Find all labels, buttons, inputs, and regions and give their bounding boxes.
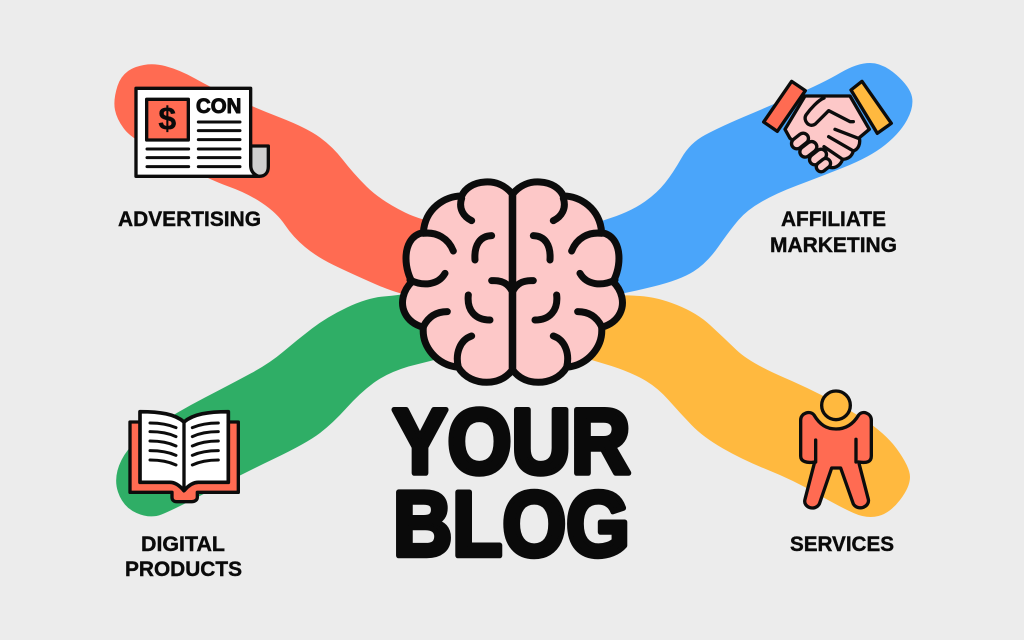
finger 4 bbox=[814, 157, 832, 174]
label: digital products: PRODUCTS bbox=[125, 558, 242, 581]
label: services: SERVICES bbox=[790, 533, 894, 556]
left hemisphere outline bbox=[403, 182, 512, 382]
fingers lower left bbox=[789, 131, 832, 174]
right hemisphere outline bbox=[513, 182, 622, 382]
book pages bbox=[140, 412, 228, 491]
ribbon: digital products (green) bbox=[116, 291, 450, 516]
icon: newspaper bbox=[136, 88, 268, 176]
icon: brain bbox=[403, 182, 622, 382]
body bbox=[801, 413, 871, 508]
ad box bbox=[147, 99, 188, 140]
label: digital products: DIGITAL bbox=[141, 533, 225, 556]
left folds bbox=[410, 194, 512, 370]
label: affiliate marketing: AFFILIATE bbox=[781, 208, 886, 231]
finger 1 bbox=[789, 131, 811, 151]
book cover bbox=[130, 422, 238, 502]
label: digital products bbox=[125, 533, 242, 581]
ribbon: advertising (red) bbox=[114, 64, 450, 296]
head bbox=[822, 391, 850, 420]
label: affiliate marketing: MARKETING bbox=[770, 234, 897, 257]
hands bbox=[785, 96, 869, 168]
spine bbox=[179, 422, 189, 491]
finger 3 bbox=[807, 147, 829, 167]
title: BLOG bbox=[393, 474, 630, 576]
page curl bbox=[251, 146, 268, 176]
left cuff bbox=[764, 81, 805, 131]
ribbon: services (yellow) bbox=[575, 295, 910, 517]
left hemisphere bbox=[403, 182, 512, 382]
right hemisphere bbox=[513, 182, 622, 382]
icon: handshake bbox=[764, 81, 891, 174]
icon: person bbox=[801, 391, 871, 508]
label: advertising: ADVERTISING bbox=[118, 208, 261, 231]
title: YOUR bbox=[392, 391, 630, 493]
right folds bbox=[513, 194, 615, 370]
finger 2 bbox=[798, 139, 819, 159]
label: affiliate marketing bbox=[770, 208, 897, 257]
arm lines bbox=[816, 439, 856, 462]
right text lines bbox=[192, 423, 218, 465]
text lines bbox=[147, 122, 240, 167]
icon: open book bbox=[130, 412, 238, 502]
dollar sign: $ bbox=[158, 100, 176, 136]
newspaper page bbox=[136, 88, 258, 176]
thumb bbox=[805, 98, 853, 125]
title bbox=[392, 391, 630, 576]
ribbon: affiliate marketing (blue) bbox=[575, 63, 912, 298]
right cuff bbox=[851, 81, 891, 133]
headline: CON bbox=[196, 94, 241, 118]
finger creases bbox=[824, 129, 858, 159]
left text lines bbox=[150, 423, 176, 465]
